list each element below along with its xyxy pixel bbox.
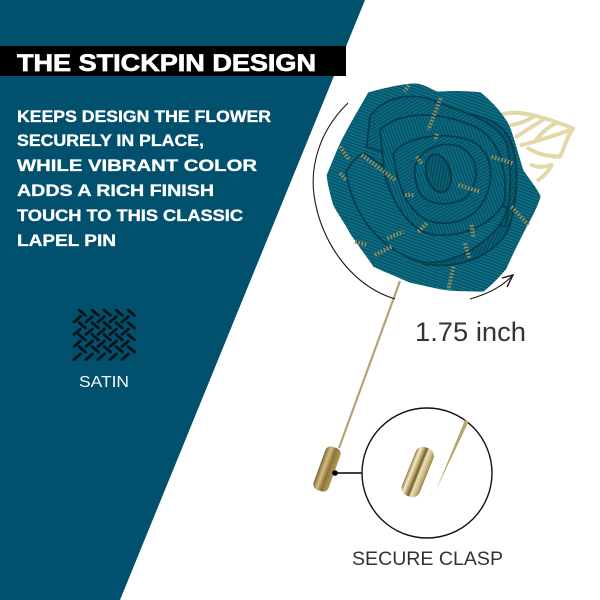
heading bar: the stickpin design: THE STICKPIN DESIGN (17, 50, 316, 77)
upper petal (367, 96, 510, 227)
inner ring (415, 145, 476, 204)
measurement label: 1.75 inch (415, 317, 526, 347)
text block: description (17, 107, 271, 250)
text block: description: LAPEL PIN (17, 231, 116, 250)
flower base (327, 83, 541, 292)
callout connector (332, 470, 362, 476)
front left petal (346, 153, 507, 263)
measurement arc with arrow (313, 103, 513, 299)
outer right petal (410, 113, 517, 265)
detached pin tip (436, 420, 468, 490)
text block: description: ADDS A RICH FINISH (17, 181, 214, 200)
text block: description: TOUCH TO THIS CLASSIC (17, 206, 243, 225)
detached clasp (399, 444, 436, 500)
inner petal (380, 115, 505, 235)
callout circle (362, 408, 492, 538)
flower centre (422, 152, 455, 195)
label: secure clasp: SECURE CLASP (352, 549, 503, 570)
heading bar: the stickpin design (0, 46, 346, 77)
label: satin: SATIN (79, 374, 129, 391)
panel: teal diagonal background (0, 0, 365, 600)
text block: description: SECURELY IN PLACE, (17, 131, 204, 150)
stick pin (339, 281, 400, 448)
spiral petal (393, 136, 491, 223)
icon: satin weave (74, 310, 134, 360)
rose flower (327, 83, 541, 292)
gold thread stitches (340, 85, 528, 290)
text block: description: KEEPS DESIGN THE FLOWER (17, 107, 271, 126)
text block: description: WHILE VIBRANT COLOR (17, 156, 257, 175)
pin clasp (312, 445, 342, 493)
icon: gold leaf (503, 113, 573, 180)
